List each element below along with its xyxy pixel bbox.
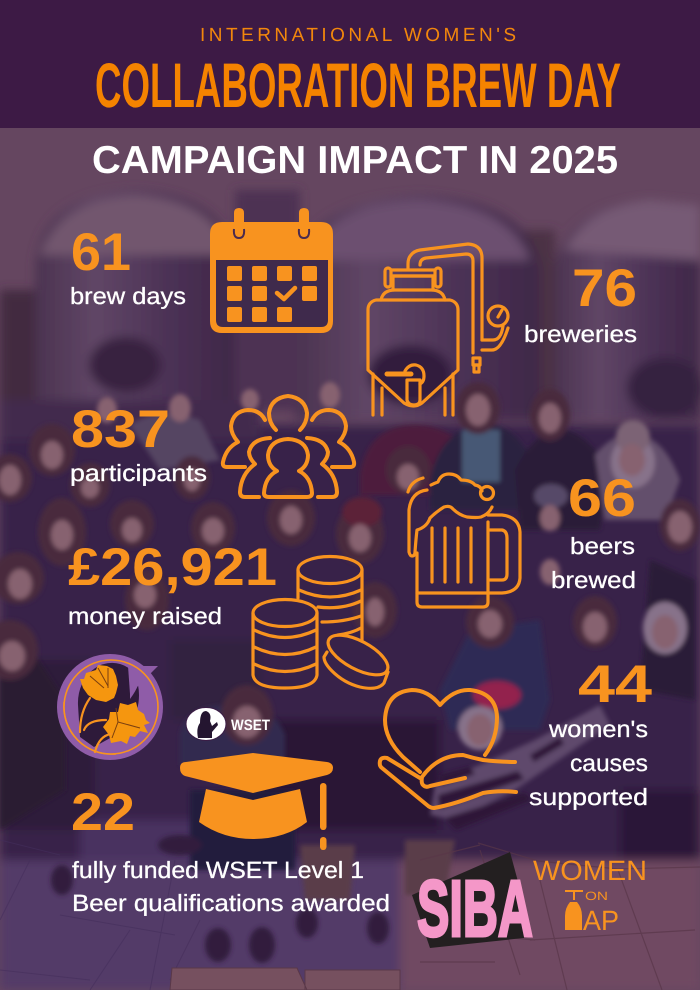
stat: WSET qualifications: Beer qualifications awarded (72, 890, 390, 916)
icon: fermenter tank (368, 244, 508, 415)
stat: women's causes supported: women's (548, 716, 648, 742)
stat: money raised (68, 538, 277, 629)
stat: WSET qualifications: 22 (71, 783, 135, 842)
stat: brew days (70, 223, 186, 309)
header band (0, 0, 700, 128)
icon: beer mug (408, 474, 520, 607)
stat: WSET qualifications: fully funded WSET Level 1 (72, 857, 364, 883)
stat: beers brewed: beers (570, 533, 635, 559)
stat: participants: participants (70, 460, 207, 486)
stat: women's causes supported: supported (529, 784, 648, 810)
stat: participants: 837 (71, 400, 170, 459)
floor tiles and cardboard boxes (0, 840, 200, 990)
stat: women's causes supported: causes (570, 750, 648, 776)
logo: Women on Tap: ON (585, 889, 608, 903)
icon: group of people (223, 396, 354, 497)
stat: breweries (524, 259, 637, 347)
logo: hop roundel (57, 654, 163, 760)
stat: brew days: 61 (71, 223, 131, 282)
stat: breweries: 76 (572, 259, 637, 318)
logo: SIBA: SIBA (417, 864, 533, 953)
stat: beers brewed: 66 (568, 469, 636, 528)
heading: campaign impact: CAMPAIGN IMPACT IN 2025 (92, 139, 618, 182)
icon: graduation cap (180, 753, 333, 850)
crowd faces (0, 382, 692, 746)
stat: beers brewed: brewed (551, 567, 636, 593)
icon: calendar (210, 208, 333, 333)
stat: WSET qualifications (71, 783, 390, 916)
icon: heart in hand (380, 690, 516, 808)
stat: money raised: £26,921 (68, 538, 277, 597)
logo: WSET: WSET (231, 717, 270, 734)
stat: participants (70, 400, 207, 486)
crowd clothes (360, 425, 480, 495)
stat: women's causes supported (529, 655, 653, 810)
logo: Women on Tap: AP (583, 905, 619, 936)
stat: breweries: breweries (524, 321, 637, 347)
logo: Women on Tap (533, 855, 647, 936)
logo: WSET (186, 708, 270, 740)
stat: brew days: brew days (70, 283, 186, 309)
eyebrow: International Women's: INTERNATIONAL WOMEN'S (200, 25, 516, 46)
crowd hair (0, 382, 700, 745)
stat: women's causes supported: 44 (578, 655, 653, 714)
icon: stack of coins (253, 556, 394, 688)
stat: beers brewed (551, 469, 636, 593)
logo: Women on Tap: WOMEN (533, 855, 647, 886)
stat: money raised: money raised (68, 603, 222, 629)
logo: SIBA (412, 852, 533, 953)
